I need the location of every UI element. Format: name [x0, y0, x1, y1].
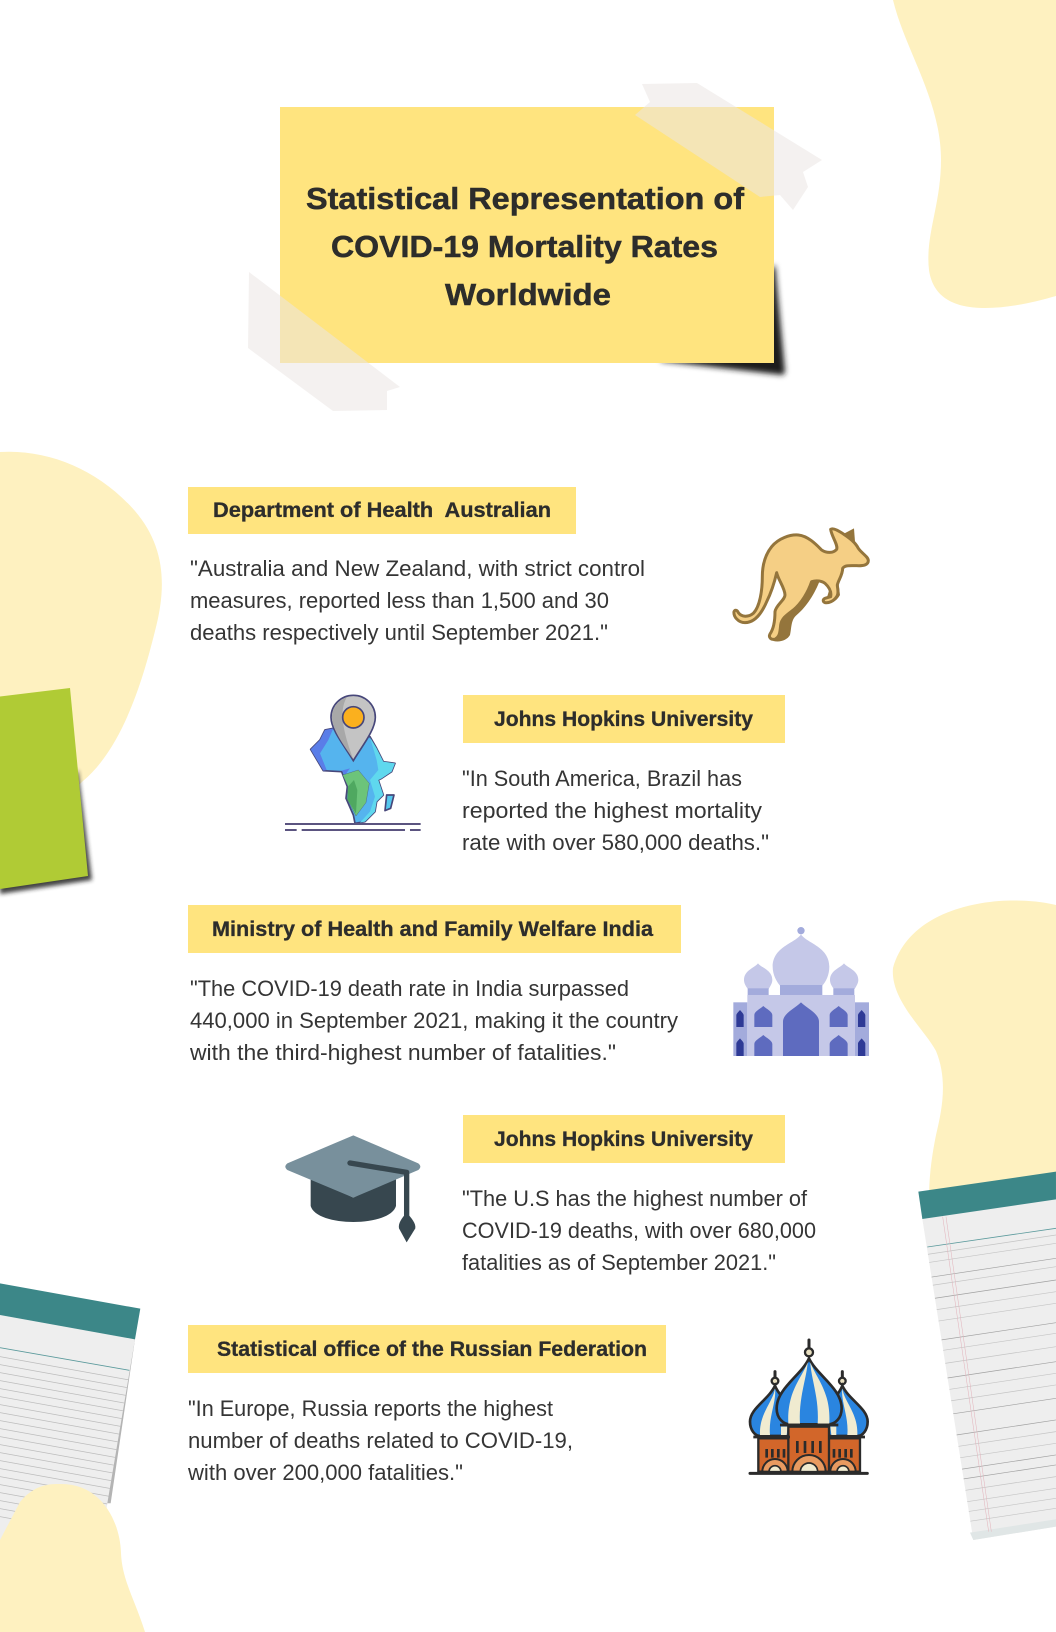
section: Johns Hopkins University (U.S) [285, 1115, 816, 1275]
body text: "Australia and New Zealand, with strict control [190, 556, 645, 581]
title background [280, 107, 774, 363]
body text: number of deaths related to COVID-19, [188, 1428, 573, 1453]
body text: "The U.S has the highest number of [462, 1186, 808, 1211]
body text: measures, reported less than 1,500 and 30 [190, 588, 609, 613]
title panel [248, 83, 822, 411]
icon: map with location pin [285, 695, 421, 830]
icon: kangaroo [734, 528, 868, 641]
section: Ministry of Health and Family Welfare India [188, 905, 869, 1065]
heading badge [188, 1325, 666, 1373]
notepad: left [0, 1283, 140, 1540]
body text [462, 1186, 816, 1275]
section: Department of Health Australian [188, 487, 868, 645]
tape: top right [635, 83, 822, 210]
heading: Johns Hopkins University [494, 1127, 753, 1151]
body text [190, 556, 645, 645]
body text: 440,000 in September 2021, making it the country [190, 1008, 678, 1033]
title text: Worldwide [445, 277, 611, 312]
blob: bottom left [0, 1484, 145, 1632]
body text: deaths respectively until September 2021." [190, 620, 608, 645]
title text: COVID-19 Mortality Rates [331, 229, 718, 264]
heading: Ministry of Health and Family Welfare India [212, 917, 654, 941]
body text: with over 200,000 fatalities." [187, 1460, 463, 1485]
body text [187, 1396, 573, 1485]
body text [462, 766, 769, 855]
body text [189, 976, 678, 1065]
icon: graduation cap [285, 1135, 420, 1242]
body text: fatalities as of September 2021." [462, 1250, 776, 1275]
section: Johns Hopkins University (Brazil) [285, 695, 785, 855]
section: Statistical office of the Russian Federation [187, 1325, 868, 1485]
green sticky note [0, 688, 92, 894]
heading badge [463, 1115, 785, 1163]
body text: "The COVID-19 death rate in India surpassed [190, 976, 629, 1001]
body text: with the third-highest number of fatalities." [189, 1040, 616, 1065]
title text: Statistical Representation of [306, 181, 745, 216]
heading: Statistical office of the Russian Federation [217, 1337, 647, 1361]
title text [306, 181, 745, 312]
body text: rate with over 580,000 deaths." [462, 830, 769, 855]
blob: top right [893, 0, 1056, 308]
blob: left middle [0, 452, 162, 860]
body text: COVID-19 deaths, with over 680,000 [462, 1218, 816, 1243]
heading badge [188, 905, 681, 953]
body text: reported the highest mortality [462, 798, 762, 823]
heading: Johns Hopkins University [494, 707, 753, 731]
body text: "In Europe, Russia reports the highest [188, 1396, 553, 1421]
icon: taj mahal [733, 927, 869, 1056]
heading badge [188, 487, 576, 534]
icon: russian cathedral [750, 1340, 868, 1473]
blob: right middle [893, 900, 1056, 1200]
notepad: right [918, 1172, 1056, 1540]
heading badge [463, 695, 785, 743]
tape: bottom left [248, 272, 400, 411]
body text: "In South America, Brazil has [462, 766, 742, 791]
heading: Department of Health Australian [213, 498, 551, 522]
